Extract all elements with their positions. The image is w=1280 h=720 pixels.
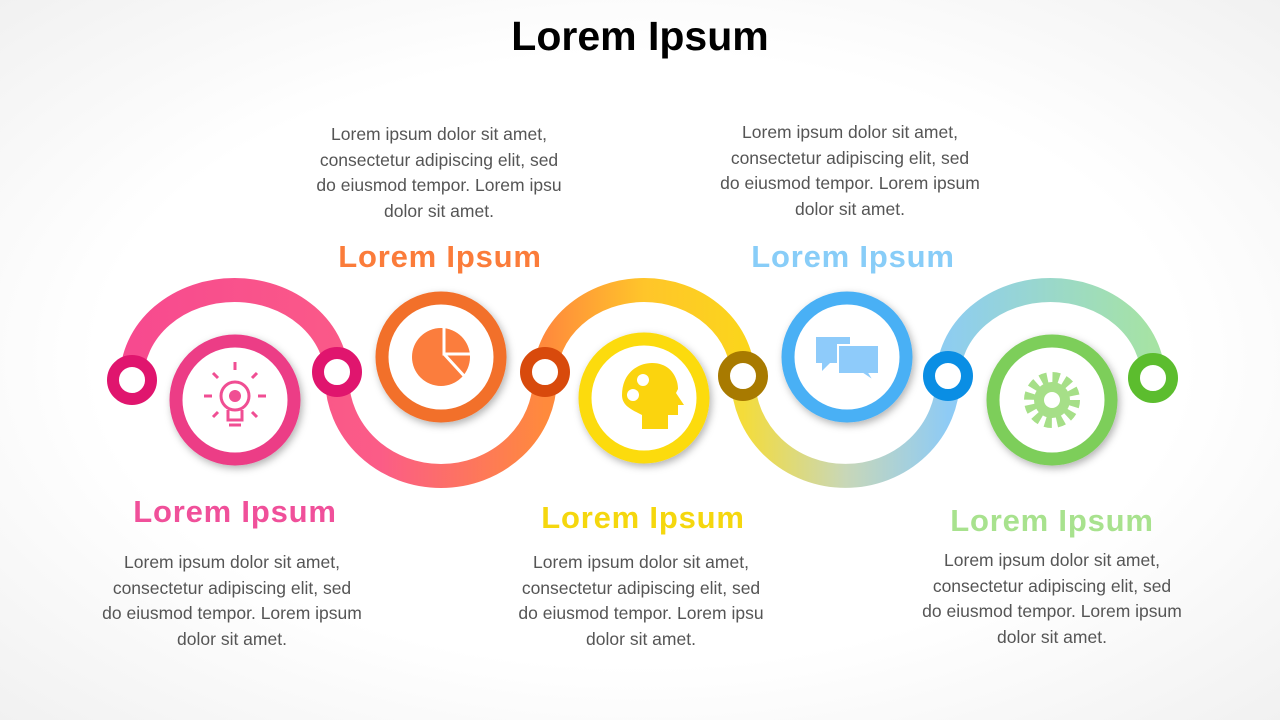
text 1: Lorem ipsum dolor sit amet, bbox=[124, 552, 340, 572]
text 2: do eiusmod tempor. Lorem ipsu bbox=[316, 175, 562, 195]
text 3 bbox=[518, 552, 764, 649]
text 1: dolor sit amet. bbox=[177, 629, 287, 649]
text 1: do eiusmod tempor. Lorem ipsum bbox=[102, 603, 362, 623]
text 2: Lorem ipsum dolor sit amet, bbox=[331, 124, 547, 144]
text 3: dolor sit amet. bbox=[586, 629, 696, 649]
text 4: dolor sit amet. bbox=[795, 199, 905, 219]
text 4 bbox=[720, 122, 980, 219]
text 3: consectetur adipiscing elit, sed bbox=[522, 578, 760, 598]
icon circle 2: pie chart bbox=[382, 298, 500, 416]
text 5: do eiusmod tempor. Lorem ipsum bbox=[922, 601, 1182, 621]
text 5: consectetur adipiscing elit, sed bbox=[933, 576, 1171, 596]
heading 1: Lorem Ipsum bbox=[133, 494, 337, 529]
text 2: consectetur adipiscing elit, sed bbox=[320, 150, 558, 170]
text 5 bbox=[922, 550, 1182, 647]
heading 2: Lorem Ipsum bbox=[338, 239, 542, 274]
heading 3: Lorem Ipsum bbox=[541, 500, 745, 535]
heading 5: Lorem Ipsum bbox=[950, 503, 1154, 538]
text 1: consectetur adipiscing elit, sed bbox=[113, 578, 351, 598]
text 4: consectetur adipiscing elit, sed bbox=[731, 148, 969, 168]
text 4: do eiusmod tempor. Lorem ipsum bbox=[720, 173, 980, 193]
text 4: Lorem ipsum dolor sit amet, bbox=[742, 122, 958, 142]
icon circle 4: chat bubbles bbox=[788, 298, 906, 416]
icon circle 1: lightbulb bbox=[176, 341, 294, 459]
icon circle 5: gear bbox=[993, 341, 1111, 459]
text 3: do eiusmod tempor. Lorem ipsu bbox=[518, 603, 764, 623]
heading 4: Lorem Ipsum bbox=[751, 239, 955, 274]
connector rings bbox=[113, 353, 1172, 399]
text 5: dolor sit amet. bbox=[997, 627, 1107, 647]
text 3: Lorem ipsum dolor sit amet, bbox=[533, 552, 749, 572]
text 5: Lorem ipsum dolor sit amet, bbox=[944, 550, 1160, 570]
text 1 bbox=[102, 552, 362, 649]
text 2: dolor sit amet. bbox=[384, 201, 494, 221]
title: Lorem Ipsum bbox=[511, 13, 769, 59]
text 2 bbox=[316, 124, 562, 221]
icon circle 3: head bbox=[585, 339, 703, 457]
